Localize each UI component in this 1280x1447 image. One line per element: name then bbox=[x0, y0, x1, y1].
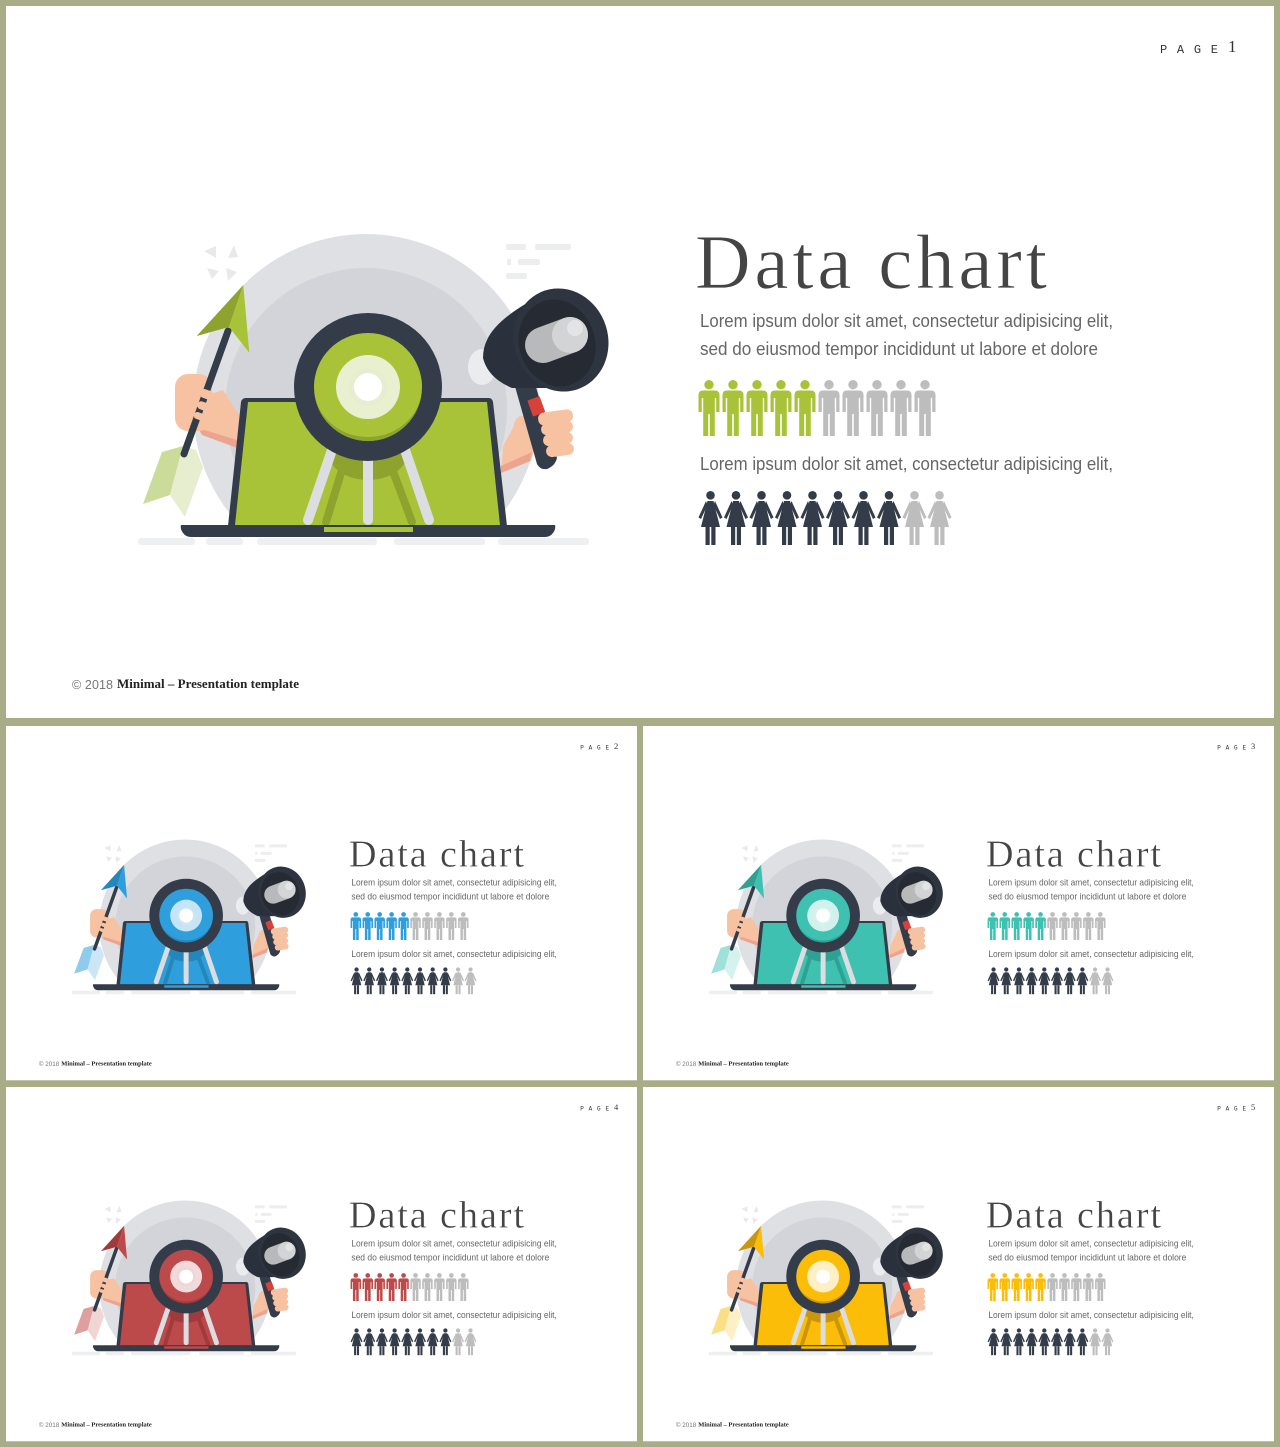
footer: Minimal – Presentation template bbox=[698, 1421, 789, 1428]
footer: © 2018 bbox=[39, 1061, 60, 1068]
page label: 3 bbox=[1251, 741, 1255, 751]
title: Data chart bbox=[986, 833, 1161, 875]
footer: Minimal – Presentation template bbox=[117, 676, 299, 691]
illustration backdrop bbox=[68, 839, 312, 1014]
illustration backdrop bbox=[130, 234, 620, 585]
text block: intro bbox=[351, 878, 557, 902]
pictogram: women 8 of 10 bbox=[698, 491, 952, 545]
icon: arrow bbox=[711, 865, 764, 980]
text block: intro: sed do eiusmod tempor incididunt ut labore et dolore bbox=[700, 339, 1098, 359]
icon: arrow bbox=[74, 1226, 127, 1341]
illustration backdrop bbox=[68, 1200, 312, 1375]
text block: second line: Lorem ipsum dolor sit amet, consectetur adipisicing elit, bbox=[351, 949, 557, 959]
pictogram: men 5 of 10 bbox=[988, 1273, 1106, 1301]
pictogram: men 5 of 10 bbox=[351, 912, 469, 940]
pictogram: men 5 of 10 bbox=[698, 380, 936, 436]
text block: second line: Lorem ipsum dolor sit amet, consectetur adipisicing elit, bbox=[700, 454, 1113, 474]
text block: intro bbox=[988, 878, 1194, 902]
icon: megaphone in hand bbox=[873, 860, 949, 958]
icon: arrow bbox=[74, 865, 127, 980]
icon: laptop with tripod bbox=[93, 1282, 279, 1351]
panel: slide 5 yellow bbox=[643, 1087, 1274, 1441]
text block: second line: Lorem ipsum dolor sit amet, consectetur adipisicing elit, bbox=[351, 1310, 557, 1320]
icon: left hand bbox=[727, 1270, 759, 1307]
icon: left hand bbox=[175, 374, 240, 449]
icon: arrow bbox=[711, 1226, 764, 1341]
footer: © 2018 bbox=[72, 678, 113, 692]
panel: slide 4 red bbox=[6, 1087, 637, 1441]
icon: target bbox=[786, 1240, 860, 1313]
pictogram: men 5 of 10 bbox=[988, 912, 1106, 940]
title: Data chart bbox=[986, 1194, 1161, 1236]
icon: megaphone in hand bbox=[236, 860, 312, 958]
page label bbox=[1217, 1102, 1255, 1112]
icon: left hand bbox=[90, 909, 122, 946]
page label: PAGE bbox=[580, 744, 609, 751]
pictogram: men 5 of 10 bbox=[351, 1273, 469, 1301]
title: Data chart bbox=[349, 1194, 524, 1236]
page label: 2 bbox=[614, 741, 618, 751]
icon: megaphone in hand bbox=[468, 276, 622, 473]
page label bbox=[1217, 741, 1255, 751]
page label: PAGE bbox=[1217, 744, 1246, 751]
icon: megaphone in hand bbox=[236, 1221, 312, 1319]
icon: arrow bbox=[143, 285, 249, 517]
text block: intro: Lorem ipsum dolor sit amet, consectetur adipisicing elit, bbox=[351, 878, 557, 888]
icon: left hand bbox=[727, 909, 759, 946]
page label: PAGE bbox=[1160, 43, 1218, 57]
icon: target bbox=[294, 313, 442, 461]
icon: laptop with tripod bbox=[730, 1282, 916, 1351]
panel: slide 1 green bbox=[6, 6, 1274, 718]
pictogram: women 8 of 10 bbox=[351, 1328, 476, 1355]
page label: PAGE bbox=[1217, 1105, 1246, 1112]
text block: intro: Lorem ipsum dolor sit amet, consectetur adipisicing elit, bbox=[988, 878, 1194, 888]
pictogram: women 8 of 10 bbox=[988, 967, 1113, 994]
icon: target bbox=[786, 879, 860, 952]
title: Data chart bbox=[695, 219, 1047, 305]
page label bbox=[580, 1102, 619, 1112]
text block: intro: sed do eiusmod tempor incididunt ut labore et dolore bbox=[351, 1253, 549, 1263]
page label bbox=[580, 741, 618, 751]
page label bbox=[1160, 37, 1236, 57]
text block: intro: sed do eiusmod tempor incididunt ut labore et dolore bbox=[988, 1253, 1186, 1263]
icon: laptop with tripod bbox=[93, 921, 279, 990]
panel: slide 3 teal bbox=[643, 726, 1274, 1080]
page label: 1 bbox=[1228, 37, 1236, 56]
footer: © 2018 bbox=[676, 1422, 697, 1429]
icon: laptop with tripod bbox=[730, 921, 916, 990]
text block: intro: Lorem ipsum dolor sit amet, consectetur adipisicing elit, bbox=[351, 1239, 557, 1249]
text block: intro: Lorem ipsum dolor sit amet, consectetur adipisicing elit, bbox=[700, 311, 1113, 331]
panel: slide 2 blue bbox=[6, 726, 637, 1080]
icon: left hand bbox=[90, 1270, 122, 1307]
page label: 5 bbox=[1251, 1102, 1255, 1112]
icon: laptop with tripod bbox=[181, 398, 555, 537]
illustration backdrop bbox=[705, 839, 949, 1014]
text block: intro bbox=[351, 1239, 557, 1263]
footer: Minimal – Presentation template bbox=[61, 1421, 152, 1428]
icon: target bbox=[149, 879, 223, 952]
text block: intro: sed do eiusmod tempor incididunt ut labore et dolore bbox=[351, 892, 549, 902]
title: Data chart bbox=[349, 833, 524, 875]
footer: Minimal – Presentation template bbox=[61, 1060, 152, 1067]
text block: second line: Lorem ipsum dolor sit amet, consectetur adipisicing elit, bbox=[988, 949, 1194, 959]
footer: Minimal – Presentation template bbox=[698, 1060, 789, 1067]
illustration backdrop bbox=[705, 1200, 949, 1375]
footer: © 2018 bbox=[676, 1061, 697, 1068]
pictogram: women 8 of 10 bbox=[351, 967, 476, 994]
pictogram: women 8 of 10 bbox=[988, 1328, 1113, 1355]
text block: intro bbox=[700, 311, 1113, 359]
text block: intro bbox=[988, 1239, 1194, 1263]
icon: target bbox=[149, 1240, 223, 1313]
page label: PAGE bbox=[580, 1105, 609, 1112]
icon: megaphone in hand bbox=[873, 1221, 949, 1319]
text block: intro: Lorem ipsum dolor sit amet, consectetur adipisicing elit, bbox=[988, 1239, 1194, 1249]
page label: 4 bbox=[614, 1102, 619, 1112]
footer: © 2018 bbox=[39, 1422, 60, 1429]
text block: intro: sed do eiusmod tempor incididunt ut labore et dolore bbox=[988, 892, 1186, 902]
text block: second line: Lorem ipsum dolor sit amet, consectetur adipisicing elit, bbox=[988, 1310, 1194, 1320]
